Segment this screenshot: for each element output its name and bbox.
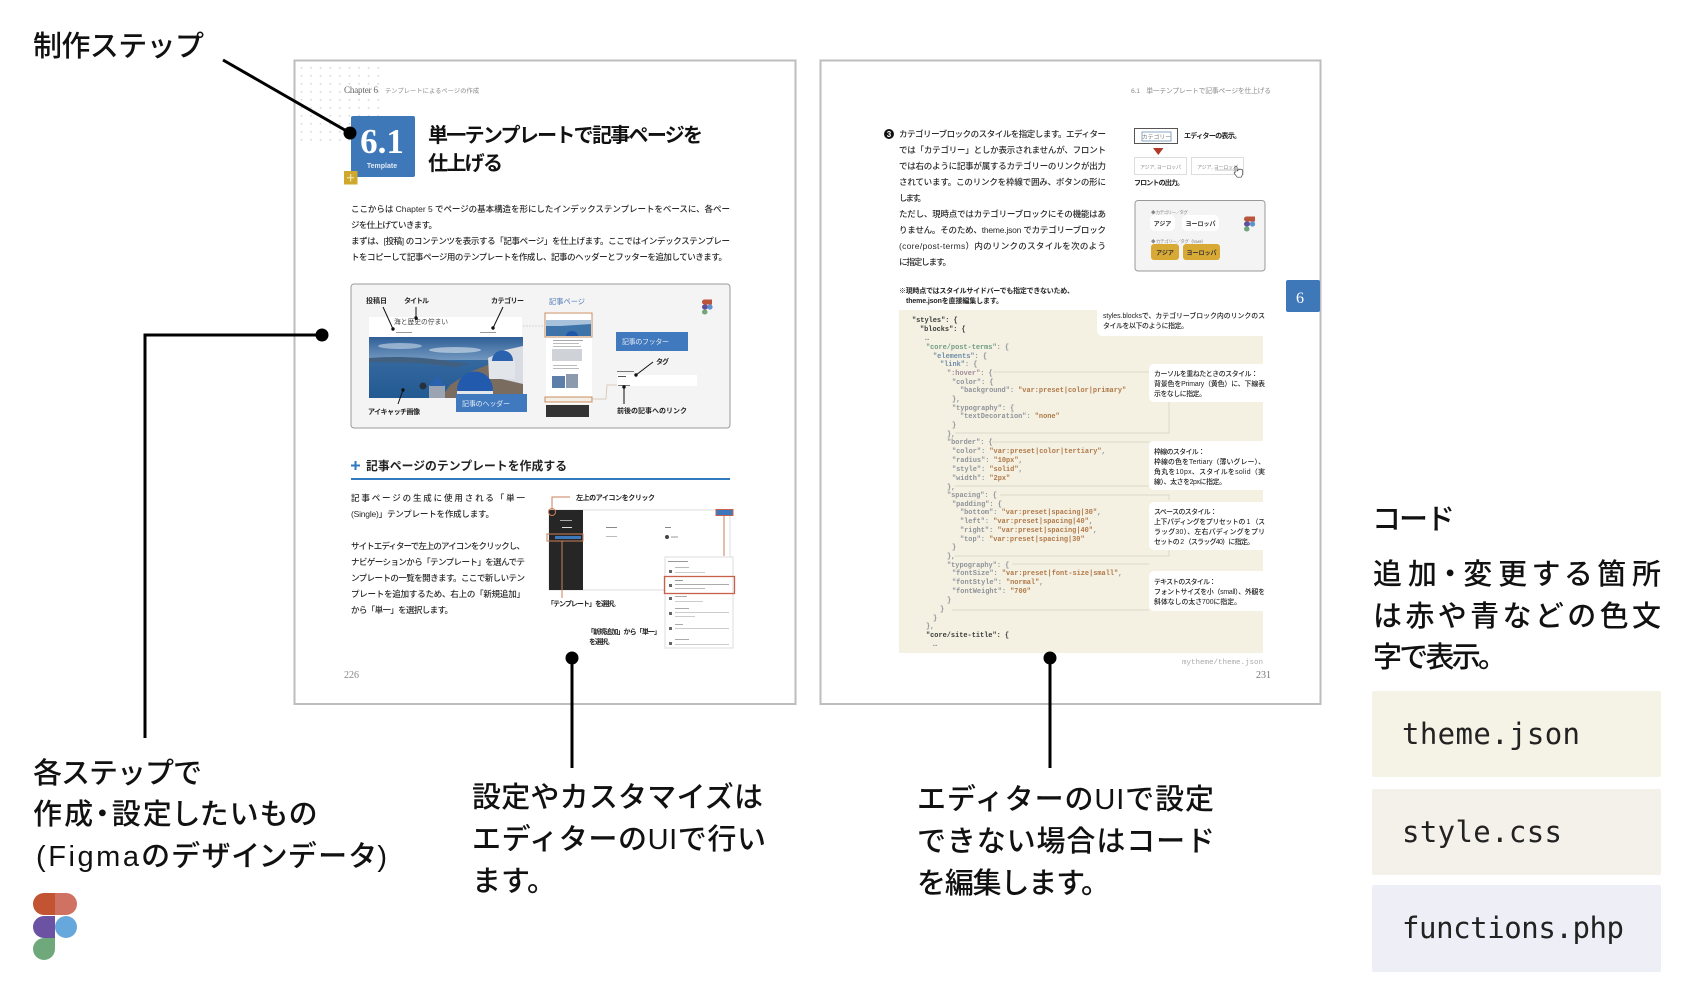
file chip: style.css: [1372, 789, 1661, 875]
figure: category tag design: ◆ カテゴリー／タグ（hover）: [1151, 238, 1206, 245]
step text: りません。そのため、theme.json でカテゴリーブロック: [899, 225, 1106, 235]
callout: hover style: [1149, 364, 1271, 402]
screenshot captions: 「新規追加」から「単一」: [587, 627, 661, 636]
section heading: 記事ページのテンプレートを作成する: [366, 459, 567, 473]
panel: right book page 231: [820, 60, 1320, 704]
code block: theme.json: }: [933, 615, 937, 623]
section heading: [351, 459, 730, 480]
code block: theme.json: "top": "var:preset|spacing|30": [960, 536, 1085, 544]
annotation labels: 記事ページ: [549, 297, 585, 306]
code block: theme.json: "background": "var:preset|color|primary": [960, 387, 1126, 395]
panel: left book page 226: [294, 60, 796, 704]
intro paragraph: [351, 204, 730, 262]
step text: では「カテゴリー」としか表示されませんが、フロント: [899, 145, 1106, 155]
annotation labels: 投稿日: [366, 296, 387, 305]
callout: border style: 線）、太さを2pxに指定。: [1154, 477, 1226, 486]
screenshot captions: 「テンプレート」を選択。: [547, 599, 620, 608]
footer label: [616, 332, 688, 351]
code block: theme.json: "padding": {: [952, 501, 1002, 509]
callout: text style: [1149, 571, 1271, 611]
code block: theme.json: "core/post-terms": {: [926, 344, 1009, 352]
step text: に指定します。: [899, 257, 951, 267]
text: design data description: 各ステップで: [33, 757, 202, 790]
figure: editor vs front output: フロントの出力。: [1134, 178, 1184, 187]
code block: theme.json: "bottom": "var:preset|spacing|30",: [960, 509, 1101, 517]
code block: theme.json: …: [933, 641, 937, 649]
note: ※現時点ではスタイルサイドバーでも指定できないため、: [899, 286, 1074, 295]
annotation labels: カテゴリー: [491, 296, 524, 305]
figure: category tag design: ヨーロッパ: [1186, 250, 1217, 257]
text: editor UI description: [472, 781, 766, 898]
running header: Chapter 6: [344, 85, 378, 95]
callout: hover style: 示をなしに指定。: [1154, 389, 1206, 398]
code block: theme.json: "fontWeight": "700": [952, 588, 1031, 596]
figure: category tag design: [1135, 200, 1265, 271]
section number badge: 6.1: [360, 122, 404, 161]
callout: border style: 枠線のスタイル：: [1154, 447, 1205, 456]
icon: small figma: [1244, 216, 1255, 232]
code block: theme.json: "fontSize": "var:preset|font-size|small",: [952, 570, 1122, 578]
callout: border style: [1149, 441, 1271, 490]
figure: category tag design: ヨーロッパ: [1185, 221, 1216, 228]
code block: theme.json: "width": "2px": [952, 475, 1010, 483]
text: code editing description: を編集します。: [917, 867, 1110, 900]
callout: text style: 斜体なしの太さ700に指定。: [1154, 597, 1241, 606]
running header: テンプレートによるページの作成: [385, 87, 479, 95]
icon: small figma: [702, 300, 713, 314]
figure: editor vs front output: カテゴリー: [1142, 133, 1171, 141]
article header card: 海と歴史の佇まい: [394, 317, 448, 326]
text: code description: は赤や青などの色文: [1373, 600, 1661, 633]
text: code editing description: できない場合はコード: [917, 825, 1215, 858]
arrow: editor UI pointer: [566, 652, 578, 768]
page title: 単一テンプレートで記事ページを: [428, 124, 703, 147]
tag and link block: タグ: [656, 357, 669, 366]
intro paragraph: ジを仕上げていきます。: [351, 220, 437, 230]
code block: theme.json: "color": {: [952, 379, 994, 387]
intro paragraph: まずは、[投稿] のコンテンツを表示する「記事ページ」を仕上げます。ここではインデックステンプレー: [351, 236, 730, 246]
section body text: [351, 493, 525, 615]
callout: border style: 角丸を10px、スタイルをsolid（実: [1154, 467, 1265, 476]
header label: 記事のヘッダー: [462, 399, 510, 408]
text: code description: 字で表示。: [1373, 641, 1507, 674]
code block: theme.json: ":hover": {: [947, 370, 993, 378]
text: code heading: コード: [1372, 504, 1455, 536]
screenshot captions: を選択。: [589, 637, 614, 646]
header label: [456, 394, 527, 412]
file chip: theme.json: theme.json: [1402, 717, 1580, 751]
step text: します。: [899, 193, 926, 203]
callout: hover style: 背景色をPrimary（黄色）に、下線表: [1154, 379, 1265, 388]
annotation labels: タイトル: [404, 296, 429, 305]
code block: theme.json: "typography": {: [952, 405, 1014, 413]
code block: theme.json: "core/site-title": {: [926, 632, 1009, 640]
chapter tab: 6: [1296, 290, 1304, 307]
icon: figma logo: [33, 893, 77, 960]
step number 3: 3: [887, 130, 892, 139]
section number badge: Template: [367, 163, 397, 170]
callout: styles.blocks: styles.blocksで、カテゴリーブロック内のリンクのス: [1103, 311, 1265, 320]
figure: category tag design: ◆ カテゴリー／タグ: [1151, 209, 1188, 216]
figure: category tag design: アジア: [1156, 250, 1174, 257]
text: code description: [1373, 558, 1661, 674]
code block: theme.json: "style": "solid",: [952, 466, 1023, 474]
icon: hand cursor: [1234, 166, 1243, 177]
footer label: 記事のフッター: [622, 337, 669, 346]
running header: 6.1 単一テンプレートで記事ページを仕上げる: [1131, 86, 1271, 95]
callout: styles.blocks: [1097, 306, 1271, 336]
section body text: 記事ページの生成に使用される「単一: [351, 493, 525, 503]
intro paragraph: トをコピーして記事ページ用のテンプレートを作成し、記事のヘッダーとフッターを追加していきます。: [351, 252, 727, 262]
code block: theme.json: "left": "var:preset|spacing|40",: [960, 518, 1093, 526]
text: code description: 追加・変更する箇所: [1373, 558, 1661, 591]
code block: theme.json: }: [940, 606, 944, 614]
file chip: style.css: style.css: [1402, 815, 1562, 849]
callout: hover style: カーソルを重ねたときのスタイル：: [1154, 369, 1258, 378]
step text: (core/post-terms）内のリンクのスタイルを次のよう: [899, 241, 1106, 251]
tag and link block: [617, 357, 697, 415]
section body text: から「単一」を選択します。: [351, 605, 453, 615]
arrow: production step pointer: [223, 60, 356, 140]
file chip: functions.php: [1372, 885, 1661, 972]
figure: editor vs front output: エディターの表示。: [1184, 131, 1241, 140]
section body text: ンプレートの一覧を開きます。ここで新しいテン: [351, 573, 525, 583]
code block: theme.json: "fontStyle": "normal",: [952, 579, 1043, 587]
arrow: code pointer: [1044, 652, 1056, 768]
text: design data description: (Figmaのデザインデータ): [36, 840, 387, 873]
page thumbnail: [523, 312, 620, 417]
note: theme.jsonを直接編集します。: [906, 296, 1003, 305]
section body text: プレートを追加するため、右上の「新規追加」: [351, 589, 525, 599]
figure: site editor screenshot: 左上のアイコンをクリック: [576, 493, 655, 502]
text: design data description: [33, 757, 387, 873]
figure: editor vs front output: [1134, 128, 1244, 187]
code block: theme.json: }: [952, 544, 956, 552]
file chip: functions.php: functions.php: [1402, 911, 1624, 945]
code block: theme.json: "styles": {: [912, 317, 958, 325]
callout: spacing style: [1149, 502, 1271, 550]
code block: theme.json: },: [947, 553, 955, 561]
file path: mytheme/theme.json: [1182, 659, 1263, 667]
code block: theme.json: [899, 310, 1263, 653]
annotation arrows: [383, 307, 653, 404]
figure: editor vs front output: アジア, ヨーロッパ: [1140, 165, 1181, 171]
code block: theme.json: }: [947, 597, 951, 605]
callout: text style: テキストのスタイル：: [1154, 577, 1216, 586]
code block: theme.json: …: [925, 335, 929, 343]
code block: theme.json: "border": {: [947, 439, 993, 447]
photo caption: アイキャッチ画像: [368, 407, 420, 416]
text: editor UI description: 設定やカスタマイズは: [472, 781, 763, 814]
code block: theme.json: "spacing": {: [947, 492, 997, 500]
step text: カテゴリーブロックのスタイルを指定します。エディター: [899, 129, 1106, 139]
page number: 226: [344, 670, 359, 681]
annotation labels: [366, 296, 585, 306]
code block: theme.json: "typography": {: [947, 562, 1009, 570]
section body text: ナビゲーションから「テンプレート」を選んでテ: [351, 557, 525, 567]
callout: spacing style: セットの 2 （スラッグ40）に指定。: [1154, 537, 1254, 546]
running header: [344, 85, 479, 95]
code block: theme.json: },: [947, 431, 955, 439]
figure: category tag design: アジア: [1154, 221, 1171, 228]
code block: theme.json: "right": "var:preset|spacing|40",: [960, 527, 1097, 535]
section number badge: [344, 116, 415, 184]
note: [899, 286, 1074, 305]
step text: されています。このリンクを枠線で囲み、ボタンの形に: [899, 177, 1106, 187]
label: production step: 制作ステップ: [33, 30, 204, 63]
text: editor UI description: ます。: [472, 866, 556, 898]
code block: theme.json: },: [947, 484, 955, 492]
page number: 231: [1256, 670, 1271, 681]
callout: spacing style: ラッグ30）、左右パディングをプリ: [1154, 527, 1265, 536]
code block: theme.json: },: [926, 623, 934, 631]
step text: ただし、現時点ではカテゴリーブロックにその機能はあ: [899, 209, 1106, 219]
chapter tab: [1286, 280, 1320, 312]
figure: editor vs front output: アジア, ヨーロッパ: [1197, 165, 1238, 171]
step text: では右のように記事が属するカテゴリーのリンクが出力: [899, 161, 1106, 171]
text: design data description: 作成・設定したいもの: [33, 798, 317, 831]
new template dropdown: [664, 557, 734, 648]
figure: article page design: [351, 284, 730, 428]
file chip: theme.json: [1372, 691, 1661, 777]
page title: [428, 124, 703, 175]
callout: styles.blocks: タイルを以下のように指定。: [1103, 321, 1188, 330]
figure: site editor screenshot: [547, 493, 734, 648]
callout: border style: 枠線の色をTertiary（薄いグレー）、: [1154, 457, 1265, 466]
code block: theme.json: "color": "var:preset|color|tertiary",: [952, 448, 1106, 456]
arrow: design data pointer: [145, 328, 328, 738]
step text: [899, 129, 1106, 267]
code block: theme.json: "elements": {: [933, 353, 987, 361]
callout: spacing style: スペースのスタイル：: [1154, 507, 1217, 516]
callout: text style: フォントサイズを小（small）、外観を: [1154, 587, 1265, 596]
code block: theme.json: "link": {: [940, 361, 977, 369]
featured photo: [369, 337, 523, 398]
text: editor UI description: エディターのUIで行い: [472, 823, 766, 856]
page title: 仕上げる: [428, 152, 503, 175]
text: code editing description: エディターのUIで設定: [917, 783, 1214, 816]
code block: theme.json: "textDecoration": "none": [960, 413, 1060, 421]
code block: theme.json: "radius": "10px",: [952, 457, 1023, 465]
step number 3: [884, 129, 894, 139]
section body text: (Single)」テンプレートを作成します。: [351, 509, 494, 519]
code block: theme.json: }: [952, 422, 956, 430]
section body text: サイトエディターで左上のアイコンをクリックし、: [351, 541, 525, 551]
callout: spacing style: 上下パディングをプリセットの 1 （ス: [1154, 517, 1265, 526]
article header card: [369, 317, 522, 338]
code block: theme.json: "blocks": {: [920, 326, 966, 334]
tag and link block: 前後の記事へのリンク: [617, 406, 687, 415]
screenshot captions: [547, 599, 661, 646]
text: code editing description: [917, 783, 1215, 900]
code block: theme.json: },: [952, 396, 960, 404]
intro paragraph: ここからは Chapter 5 でページの基本構造を形にしたインデックステンプレートをベースに、各ペー: [351, 204, 730, 214]
